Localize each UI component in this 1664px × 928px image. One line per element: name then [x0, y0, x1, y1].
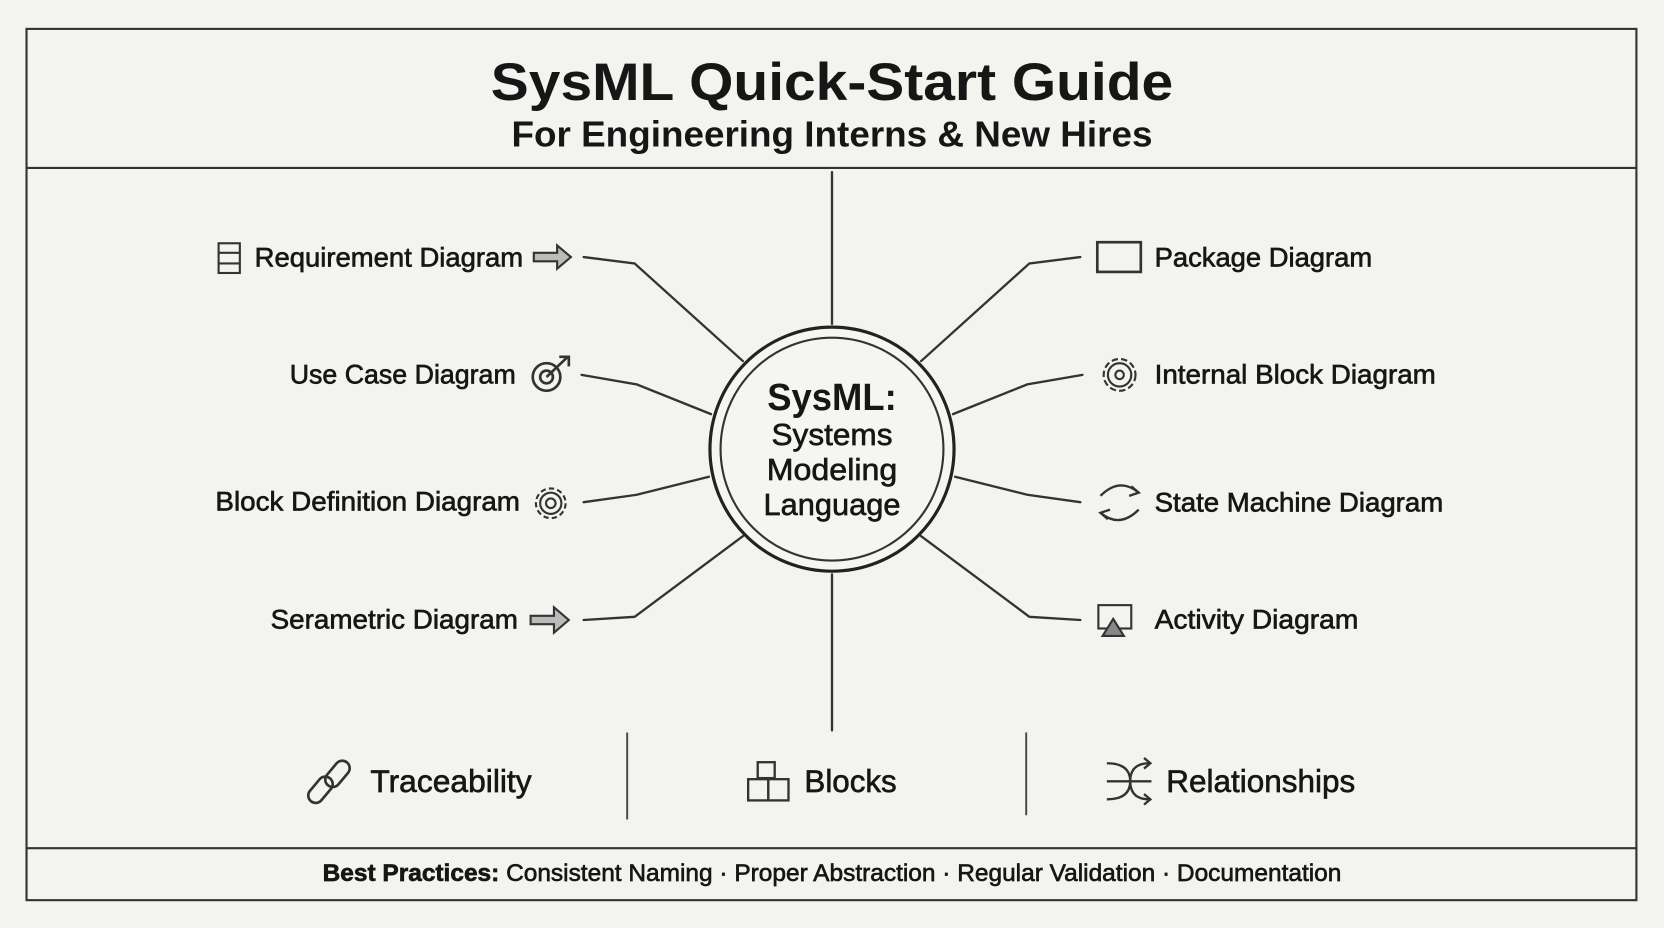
subtitle: For Engineering Interns & New Hires	[512, 114, 1152, 155]
center hub: Systems	[772, 417, 892, 452]
concept: Traceability	[305, 758, 532, 806]
concept: Blocks: Blocks	[804, 763, 897, 799]
item: Activity Diagram: Activity Diagram	[1155, 604, 1358, 634]
title	[491, 53, 1173, 155]
item: Serametric Diagram: Serametric Diagram	[271, 604, 518, 634]
item: Internal Block Diagram: Internal Block Diagram	[1155, 359, 1436, 389]
concept: Relationships: Relationships	[1166, 763, 1355, 799]
center hub: SysML:	[767, 376, 897, 419]
center hub: Modeling	[767, 452, 897, 487]
center hub	[710, 327, 954, 571]
item: Block Definition Diagram: Block Definition Diagram	[215, 487, 520, 517]
item: Use Case Diagram: Use Case Diagram	[290, 359, 516, 389]
spokes	[582, 172, 1082, 730]
center hub: Language	[764, 487, 900, 522]
item: Requirement Diagram: Requirement Diagram	[255, 243, 523, 273]
item: Package Diagram: Package Diagram	[1155, 243, 1372, 273]
concept: Relationships	[1107, 758, 1355, 805]
item: State Machine Diagram: State Machine Diagram	[1155, 488, 1443, 518]
title: SysML Quick-Start Guide	[491, 53, 1173, 112]
concept: Blocks	[748, 762, 897, 800]
dividers	[627, 732, 1026, 820]
concept: Traceability: Traceability	[370, 763, 532, 799]
footer: best practices: Best Practices: Consistent Naming · Proper Abstraction · Regular Validation · Documentation	[323, 860, 1341, 887]
